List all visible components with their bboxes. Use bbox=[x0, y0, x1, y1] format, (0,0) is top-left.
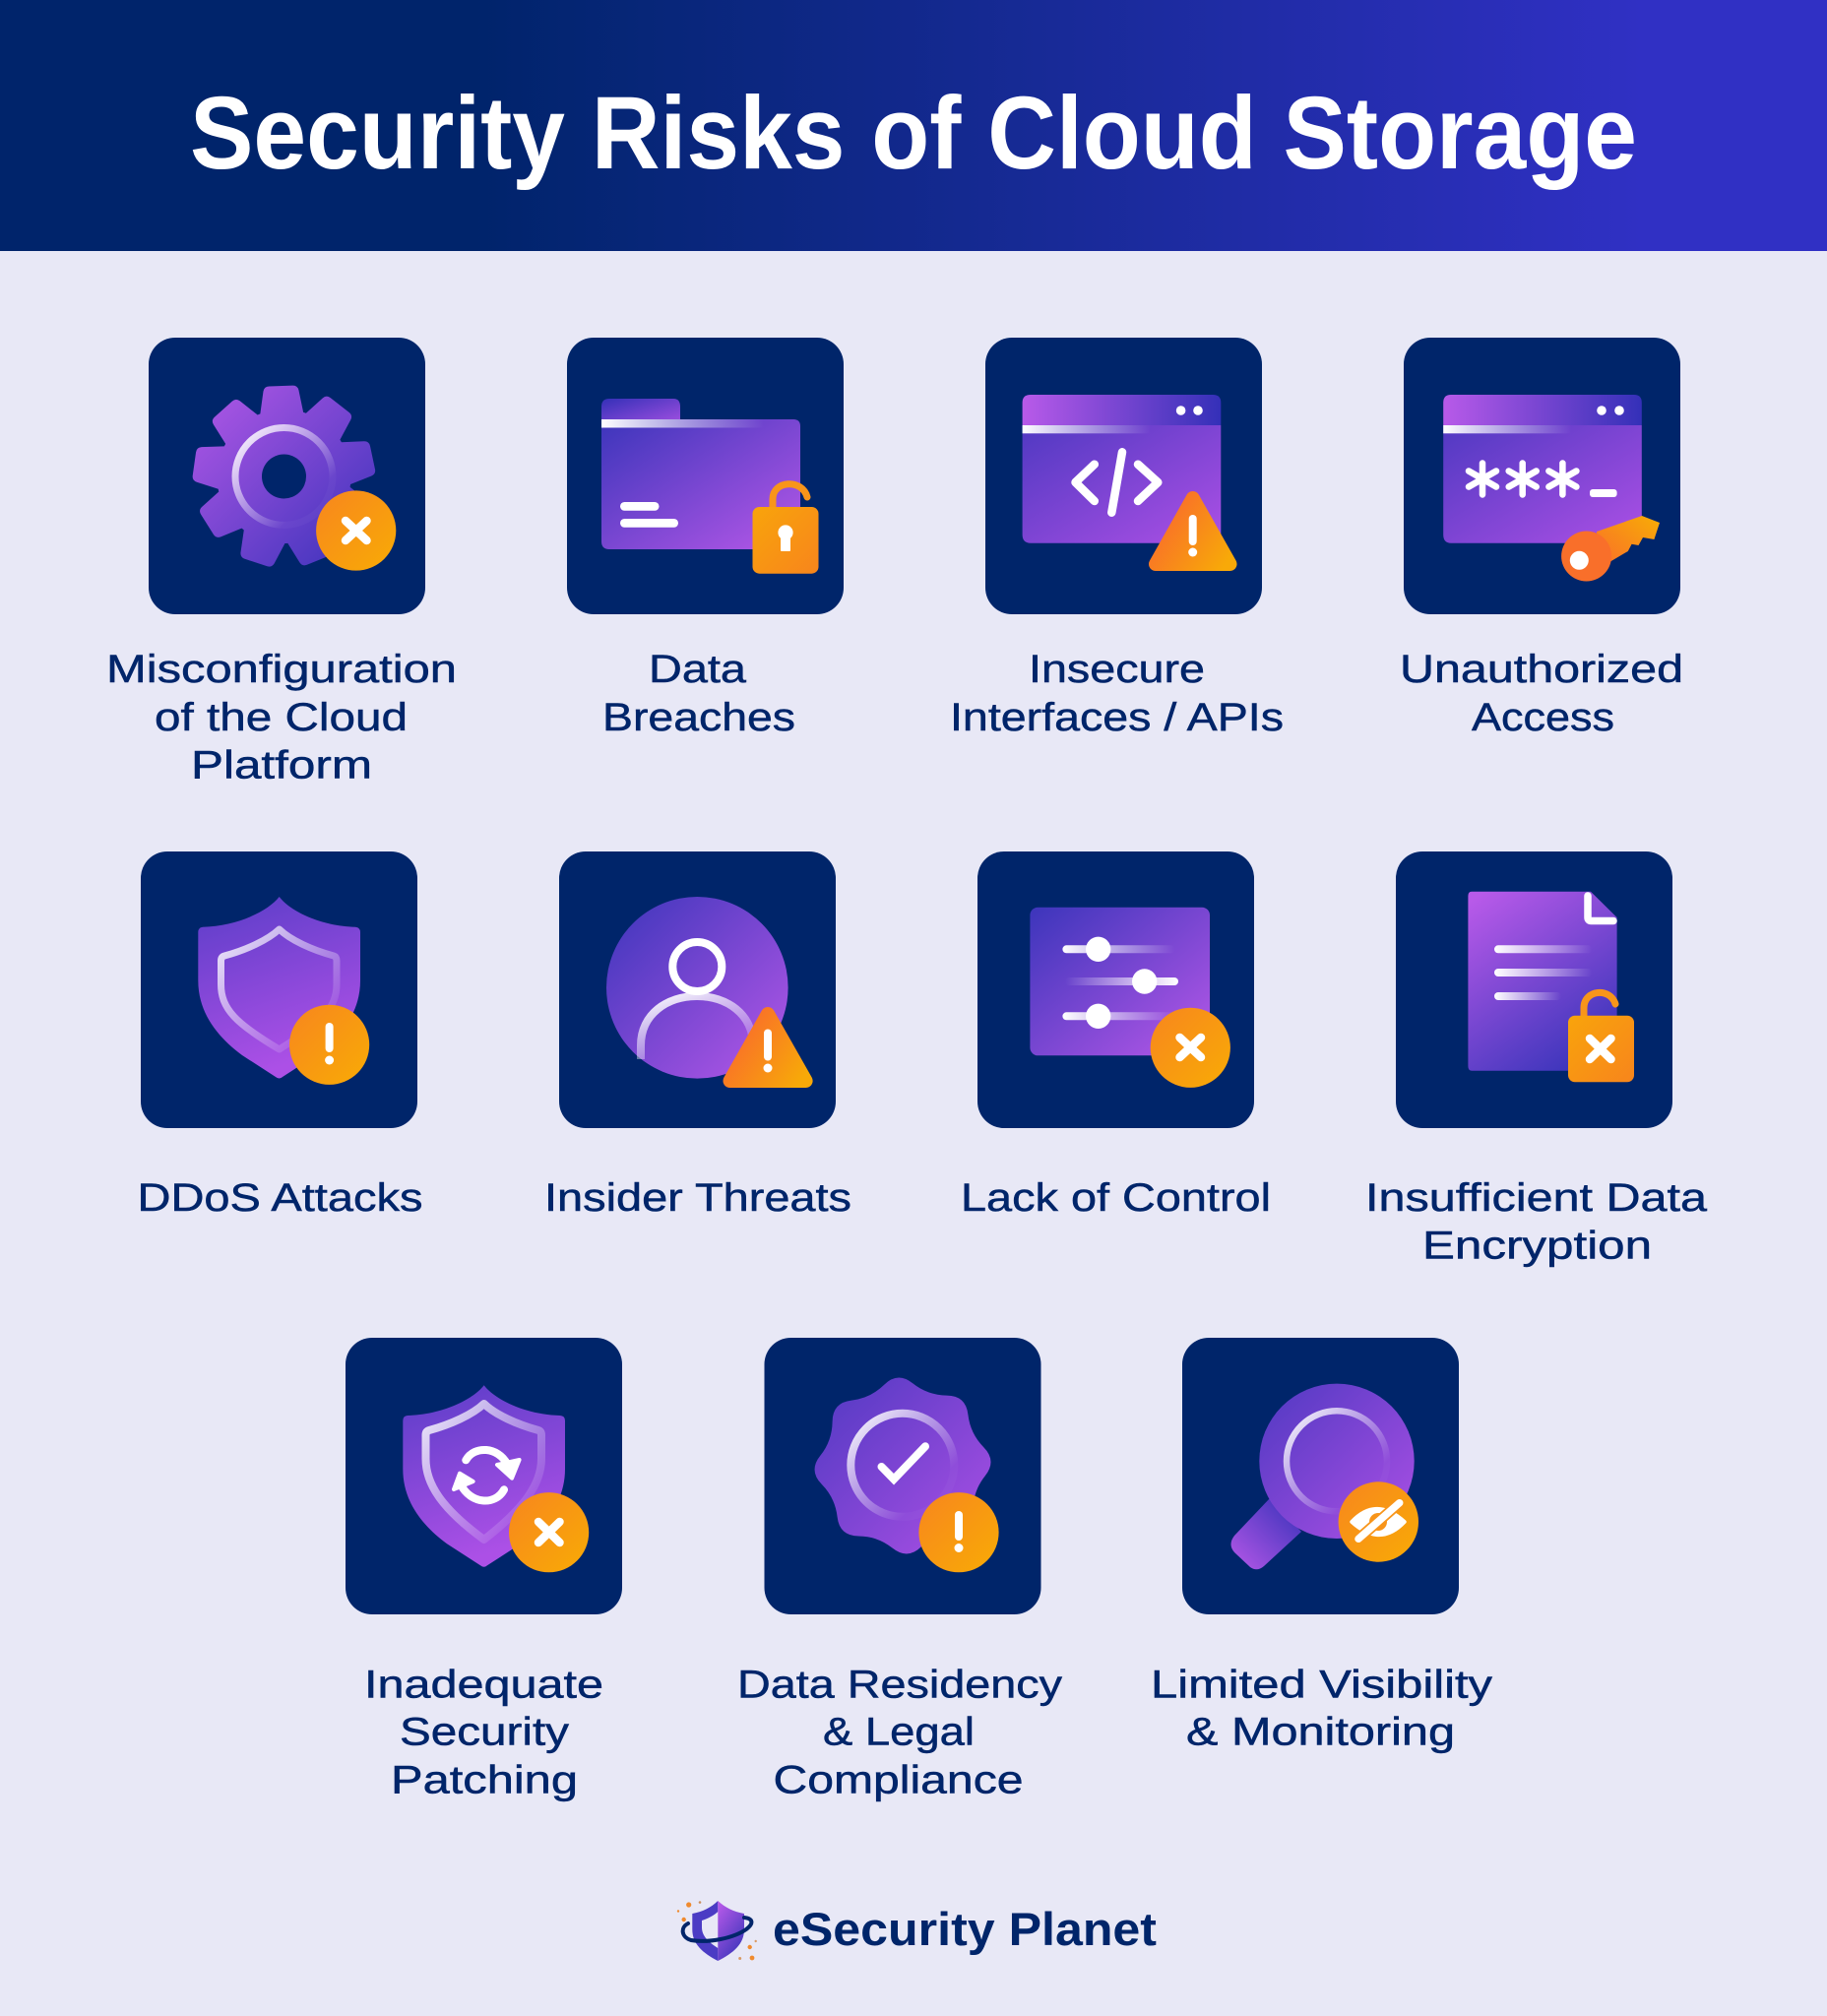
icon: shield with alert badge bbox=[198, 897, 369, 1085]
label bbox=[737, 1663, 1062, 1801]
icon: gear with x badge bbox=[187, 379, 396, 573]
panel: insufficient data encryption bbox=[1365, 851, 1708, 1268]
logo: eSecurity Planet bbox=[677, 1901, 1157, 1961]
label: Lack of Control bbox=[961, 1176, 1271, 1220]
panel: data residency & legal compliance bbox=[737, 1338, 1062, 1801]
panel: insider threats bbox=[544, 851, 851, 1220]
label: DDoS Attacks bbox=[138, 1176, 423, 1220]
label: Access bbox=[1472, 696, 1614, 739]
label bbox=[602, 648, 795, 739]
label: & Monitoring bbox=[1186, 1711, 1455, 1754]
label bbox=[364, 1663, 603, 1801]
label: Limited Visibility bbox=[1151, 1663, 1492, 1706]
label: Insider Threats bbox=[544, 1176, 851, 1220]
label: Platform bbox=[191, 744, 372, 788]
icon: shield with refresh arrows and x badge bbox=[403, 1385, 589, 1572]
label bbox=[950, 648, 1284, 739]
panel: misconfiguration of the cloud platform bbox=[106, 338, 457, 788]
label: Inadequate bbox=[364, 1663, 603, 1706]
icon: magnifier with hidden-eye badge bbox=[1230, 1384, 1418, 1569]
label: Patching bbox=[391, 1758, 578, 1801]
panel: limited visibility & monitoring bbox=[1151, 1338, 1492, 1754]
panel: DDoS attacks bbox=[138, 851, 423, 1220]
label: Data bbox=[649, 648, 747, 691]
header banner bbox=[0, 0, 1827, 251]
icon: certificate seal with alert badge bbox=[815, 1378, 999, 1572]
label: Unauthorized bbox=[1400, 648, 1683, 691]
icon: folder with open lock bbox=[601, 399, 819, 574]
icon: person with warning triangle bbox=[606, 897, 806, 1081]
icon: logo shield with ring bbox=[677, 1901, 757, 1961]
panel: insecure interfaces / APIs bbox=[950, 338, 1284, 739]
panel: data breaches bbox=[567, 338, 844, 739]
panel: inadequate security patching bbox=[346, 1338, 622, 1801]
label: Misconfiguration bbox=[106, 648, 457, 691]
label: Breaches bbox=[602, 696, 795, 739]
label: Interfaces / APIs bbox=[950, 696, 1284, 739]
label: Insufficient Data bbox=[1365, 1176, 1708, 1220]
label bbox=[1151, 1663, 1492, 1754]
label: Encryption bbox=[1422, 1225, 1652, 1268]
label: Security bbox=[400, 1711, 569, 1754]
logo wordmark: eSecurity Planet bbox=[773, 1903, 1157, 1955]
title: Security Risks of Cloud Storage bbox=[190, 76, 1637, 191]
label bbox=[106, 648, 457, 788]
label: Compliance bbox=[774, 1758, 1024, 1801]
label: Data Residency bbox=[737, 1663, 1062, 1706]
icon: document with open lock bbox=[1468, 892, 1634, 1082]
icon: sliders panel with x badge bbox=[1030, 908, 1230, 1088]
label bbox=[1365, 1176, 1708, 1268]
icon: code window with warning triangle bbox=[1023, 395, 1230, 564]
icon: password window with key bbox=[1443, 395, 1660, 581]
panel: lack of control bbox=[961, 851, 1271, 1220]
label: Insecure bbox=[1029, 648, 1205, 691]
label bbox=[1400, 648, 1683, 739]
label: of the Cloud bbox=[155, 696, 408, 739]
panel: unauthorized access bbox=[1400, 338, 1683, 739]
label: & Legal bbox=[823, 1711, 975, 1754]
